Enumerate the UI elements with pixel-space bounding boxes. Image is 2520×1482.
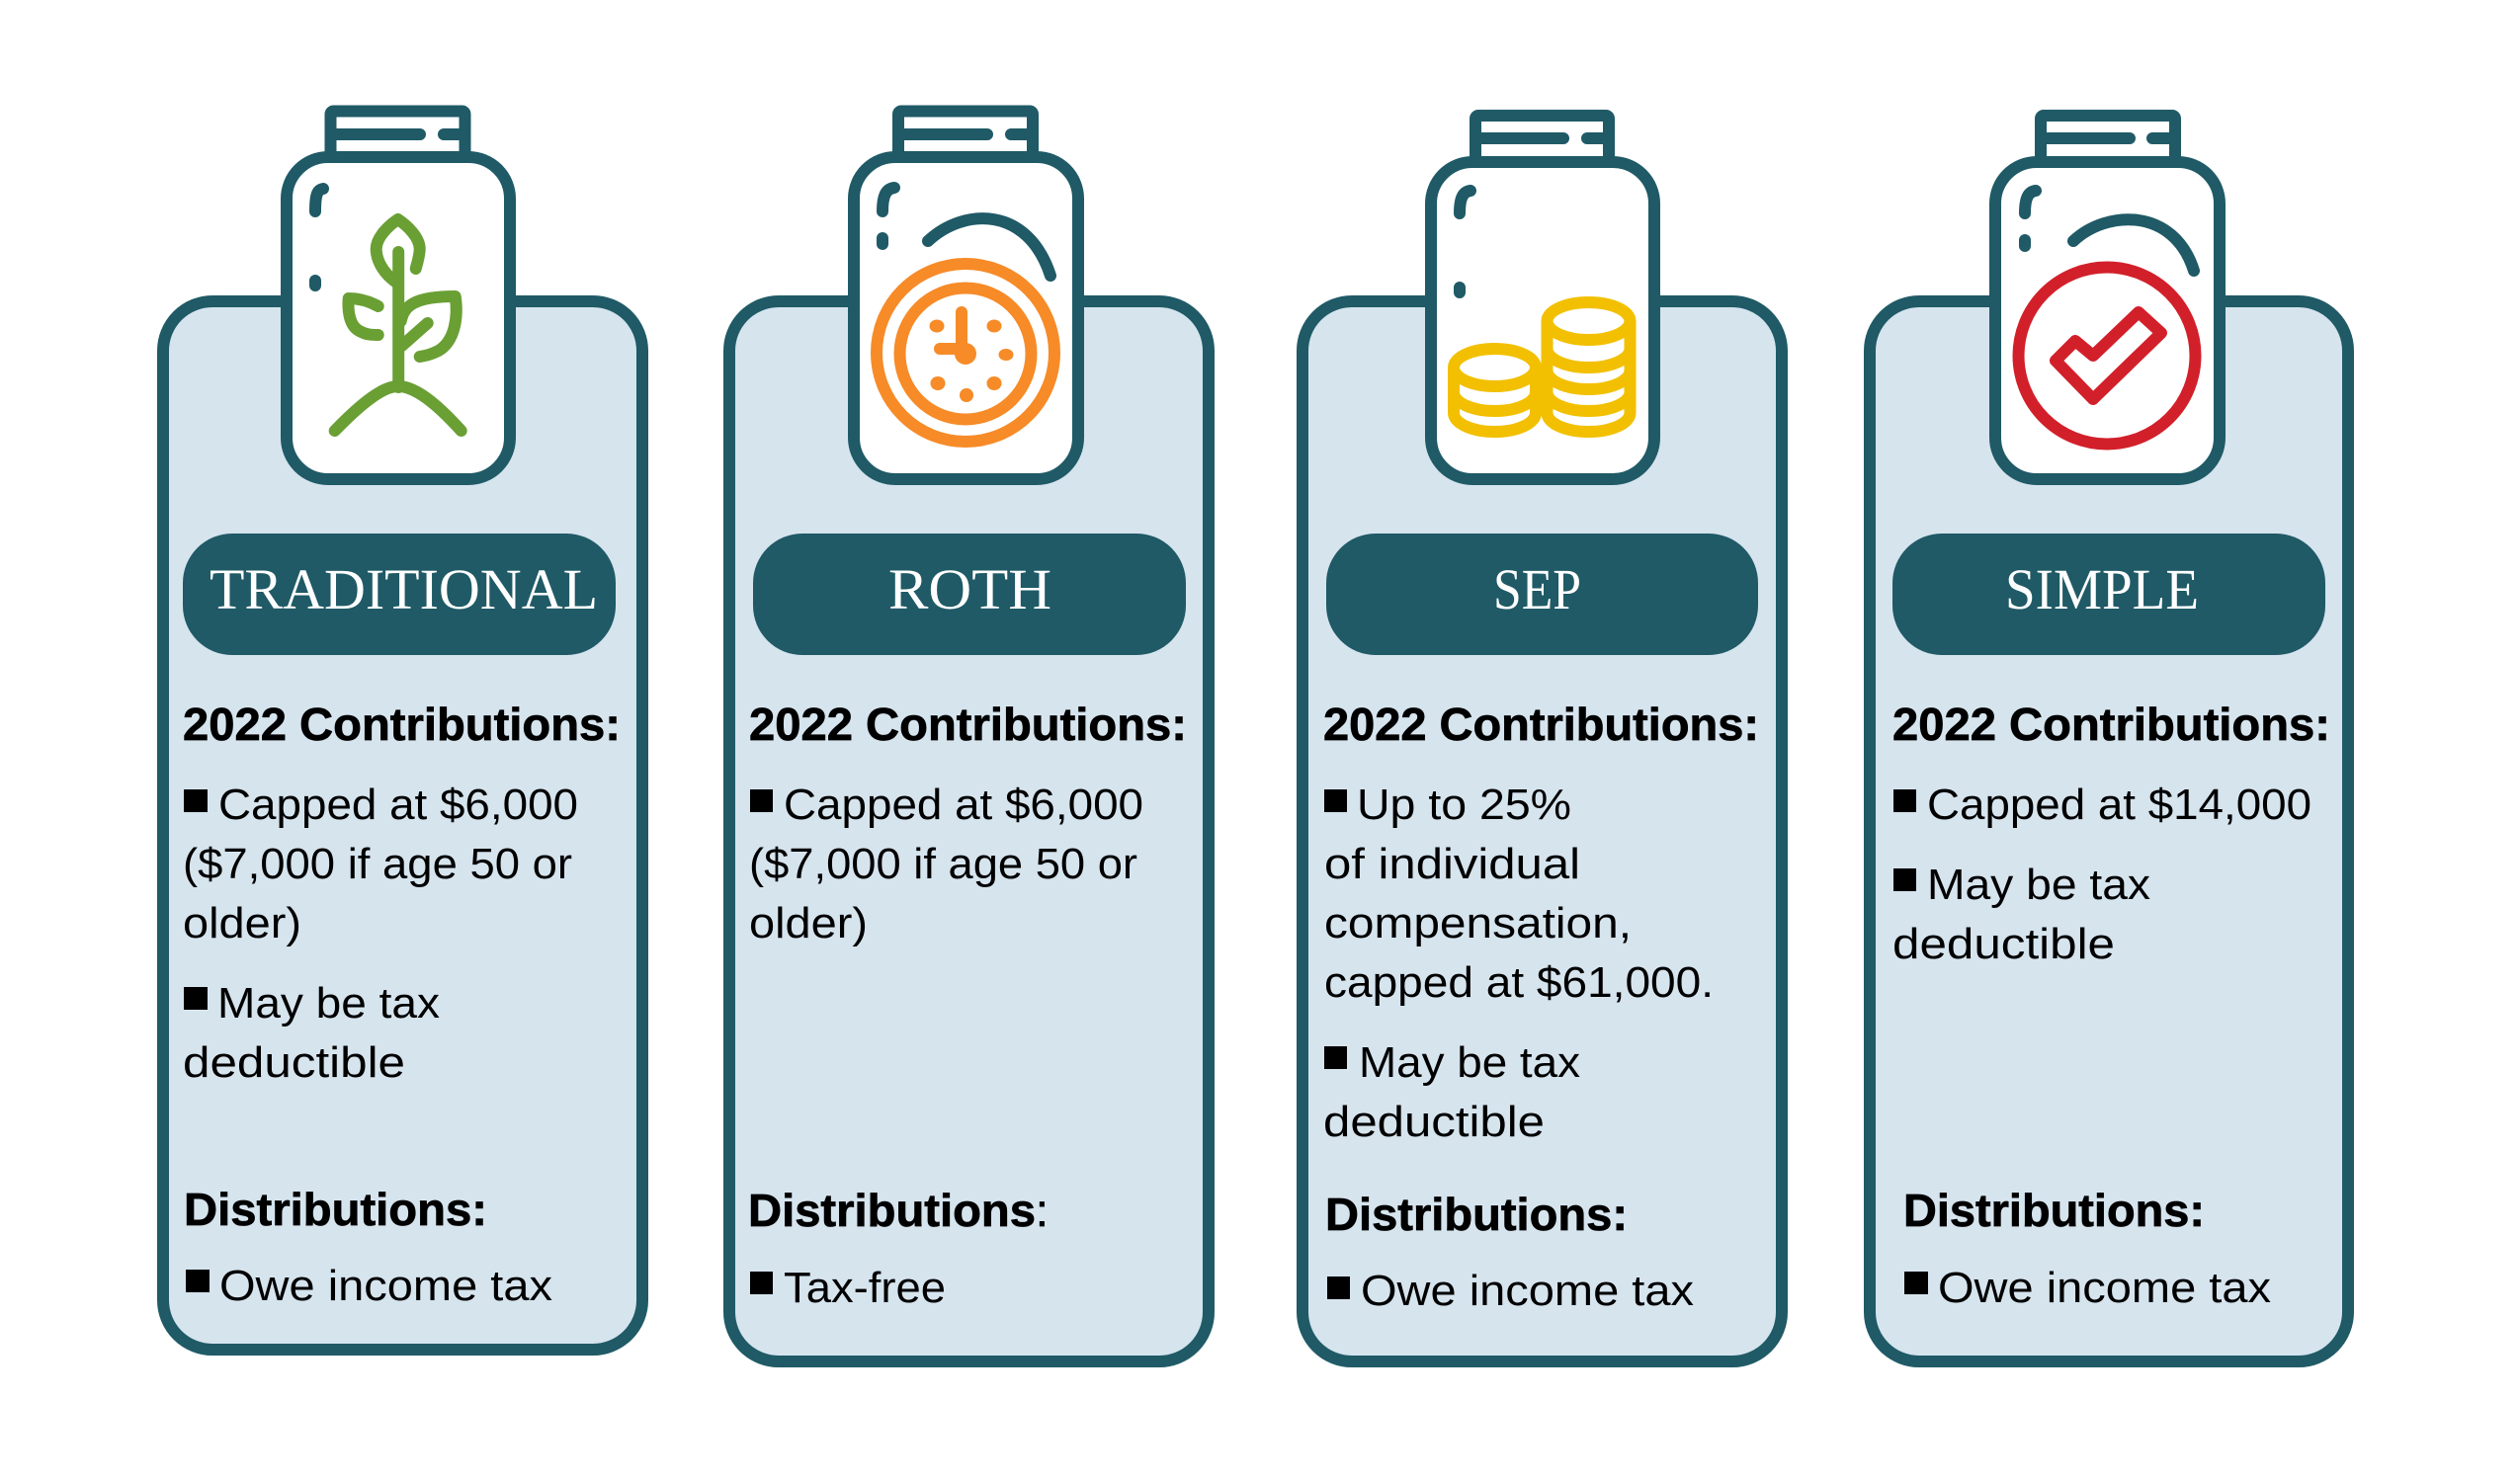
icon: jar — [287, 111, 510, 479]
contributions list: ($7,000 if age 50 or — [183, 840, 572, 888]
contributions list: compensation, — [1324, 899, 1632, 947]
contributions list: May be tax — [217, 979, 440, 1028]
icon: check mark in circle — [2018, 267, 2196, 445]
contributions list: Capped at $6,000 — [218, 781, 578, 829]
icon: plant — [335, 219, 462, 431]
contributions list: older) — [749, 899, 868, 947]
contributions list: capped at $61,000. — [1324, 958, 1714, 1007]
contributions list: Up to 25% — [1357, 781, 1571, 829]
icon: jar — [854, 111, 1078, 479]
contributions heading: 2022 Contributions: — [1892, 699, 2330, 750]
heading pill: ROTH: ROTH — [888, 557, 1051, 621]
contributions list — [1892, 781, 2311, 968]
contributions heading: 2022 Contributions: — [749, 699, 1187, 750]
contributions heading: 2022 Contributions: — [1323, 699, 1759, 750]
contributions list — [1323, 781, 1714, 1146]
card background — [163, 301, 642, 1350]
distributions heading: Distributions: — [748, 1185, 1049, 1236]
distributions list: Tax-free — [784, 1264, 946, 1312]
contributions list: May be tax — [1927, 861, 2150, 909]
heading pill: ROTH — [753, 534, 1186, 655]
icon: jar — [1431, 116, 1654, 479]
contributions list — [749, 781, 1143, 947]
distributions list: Owe income tax — [219, 1262, 552, 1310]
distributions list: Owe income tax — [1938, 1264, 2271, 1312]
heading pill: SEP: SEP — [1493, 557, 1581, 621]
heading pill: TRADITIONAL — [183, 534, 616, 655]
contributions list: deductible — [183, 1038, 405, 1087]
contributions list: Capped at $6,000 — [784, 781, 1143, 829]
heading pill: TRADITIONAL: TRADITIONAL — [210, 557, 598, 621]
heading pill: SEP — [1326, 534, 1758, 655]
distributions list: Owe income tax — [1361, 1267, 1694, 1315]
panel: traditional — [163, 111, 642, 1350]
card background — [729, 301, 1209, 1361]
contributions list: of individual — [1324, 840, 1580, 888]
card background — [1870, 301, 2348, 1361]
contributions heading: 2022 Contributions: — [183, 699, 621, 750]
distributions heading: Distributions: — [1325, 1189, 1628, 1240]
icon: coins — [1454, 302, 1631, 432]
contributions list: deductible — [1892, 920, 2115, 968]
contributions list: May be tax — [1359, 1038, 1580, 1087]
icon: jar — [1995, 116, 2220, 479]
panel: simple — [1870, 116, 2348, 1361]
panel: sep — [1302, 116, 1782, 1361]
card background — [1302, 301, 1782, 1361]
distributions heading: Distributions: — [1903, 1185, 2205, 1236]
heading pill: SIMPLE: SIMPLE — [2005, 557, 2199, 621]
contributions list: ($7,000 if age 50 or — [749, 840, 1137, 888]
icon: clock — [877, 264, 1054, 442]
contributions list: older) — [183, 899, 301, 947]
distributions heading: Distributions: — [184, 1184, 487, 1235]
contributions list: deductible — [1323, 1098, 1545, 1146]
contributions list — [183, 781, 578, 1087]
contributions list: Capped at $14,000 — [1927, 781, 2311, 829]
heading pill: SIMPLE — [1892, 534, 2325, 655]
panel: roth — [729, 111, 1209, 1361]
